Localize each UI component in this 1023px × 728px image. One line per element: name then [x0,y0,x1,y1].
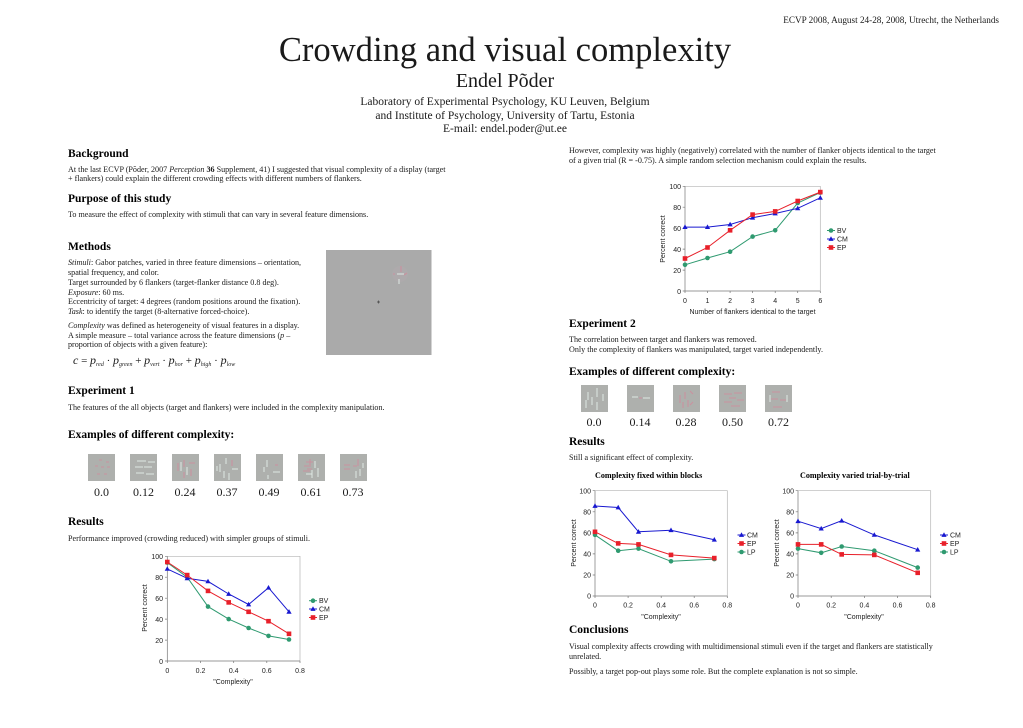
heading: purpose: Purpose of this study [68,193,171,205]
axis labels: 0.6 [262,668,272,675]
complexity formula: p [168,353,175,367]
panel: experiment 2 [569,318,823,462]
axis labels: Number of flankers identical to the target [689,309,816,316]
axis labels: 100 [151,554,163,561]
methods text: Complexity was defined as heterogeneity of visual features in a display. [68,321,299,330]
legend [940,532,961,556]
example 0.0 [88,454,115,481]
axis labels: 0.6 [689,602,699,610]
methods text [67,258,301,349]
legend [309,598,330,622]
complexity formula: hor [175,362,184,368]
methods text: Task: to identify the target (8-alternative forced-choice). [68,307,249,316]
complexity formula: p [112,353,119,367]
author and affiliations: E-mail: endel.poder@ut.ee [443,123,567,135]
axis labels: 0 [683,298,687,305]
results text: Still a significant effect of complexity. [569,453,693,462]
series EP [593,530,717,560]
example 0.37 [214,454,241,481]
axis labels: 0.2 [196,668,205,675]
conference note: ECVP 2008, August 24-28, 2008, Utrecht, the Netherlands [783,15,999,25]
methods text: Eccentricity of target: 4 degrees (random positions around the fixation). [68,297,300,306]
panel: conclusions [569,624,934,676]
complexity formula: high [201,362,211,368]
heading: methods: Methods [68,241,111,253]
example values: 0.61 [300,485,322,499]
conclusions text: Possibly, a target pop-out plays some role. But the complete explanation is not so simple. [569,667,858,676]
legend: CM [747,532,758,540]
axis labels: 40 [583,552,591,558]
legend: BV [319,598,329,605]
example 0.12 [130,454,157,481]
axis labels: Percent correct [571,519,578,567]
series EP [683,190,823,261]
experiment 2 text: The correlation between target and flankers was removed. [569,335,757,344]
axis labels: 0.4 [656,602,666,610]
background text: At the last ECVP (Põder, 2007 Perception 36 Supplement, 41) I suggested that visual complexity of a display (target [68,165,446,174]
methods text: Stimuli: Gabor patches, varied in three feature dimensions – orientation, [68,258,301,267]
axis labels: 40 [673,247,681,254]
complexity formula: · [160,355,169,367]
axis labels: 20 [673,268,681,275]
heading: background: Background [68,148,129,160]
author and affiliations [360,70,650,135]
example 0.14 [627,385,654,412]
axis labels [660,184,822,316]
axis labels: 0.2 [826,602,836,610]
legend [738,532,758,556]
axis labels: 100 [579,488,591,496]
example values: 0.49 [258,485,280,499]
legend: LP [747,550,756,556]
complexity formula: · [104,355,113,367]
stimulus examples row [88,454,367,499]
complexity formula: vert [150,362,160,368]
results text: Performance improved (crowding reduced) with simpler groups of stimuli. [68,534,310,543]
line chart: percent correct by identical flankers [660,184,848,316]
experiment 1 text: The features of the all objects (target and flankers) were included in the complexity manipulation. [68,403,385,412]
axis labels: 0.6 [893,602,902,610]
axis labels: Percent correct [774,519,781,567]
axis labels: 2 [728,298,732,305]
axis labels: 0.8 [926,602,936,610]
complexity formula: p [143,353,150,367]
axis labels: 0 [796,602,800,610]
example values: 0.14 [630,415,650,429]
axis labels: 0 [159,659,163,666]
series BV [683,190,823,267]
example values: 0.72 [768,415,789,429]
legend: EP [950,541,960,548]
line chart: complexity varied trial-by-trial [774,471,961,621]
axis labels: 80 [583,510,591,516]
methods text: Exposure: 60 ms. [67,288,124,297]
series CM [682,195,823,229]
axis labels: 3 [751,298,755,305]
axis labels: 0 [593,602,597,610]
example 0.49 [256,454,283,481]
axis labels [571,488,732,621]
complexity formula: c = p [73,353,96,367]
methods text: spatial frequency, and color. [68,268,159,277]
legend: EP [747,541,757,548]
legend [827,228,848,252]
heading: examples: Examples of different complexity: [68,429,234,441]
axis labels: 20 [786,572,794,580]
series LP [796,544,920,570]
example values: 0.37 [216,485,238,499]
axis labels: 100 [669,184,681,191]
example values: 0.50 [722,415,743,429]
axis labels [142,554,305,686]
series BV [165,560,291,642]
heading: examples: Examples of different complexity: [569,366,735,378]
axis labels [774,488,936,621]
axis labels: 5 [796,298,800,305]
conclusions text [569,642,934,676]
complexity formula: + [183,355,195,367]
methods text: proportion of objects with a given feature): [68,340,207,349]
experiment 2 text: Only the complexity of flankers was manipulated, target varied independently. [569,345,823,354]
axis labels: 0.4 [860,602,869,610]
example values: 0.24 [174,485,196,499]
axis labels: 60 [583,530,591,538]
series CM [795,518,920,552]
chart title: Complexity fixed within blocks [595,471,702,480]
panel: experiment 1 [68,385,385,543]
legend: CM [950,532,961,540]
heading: experiment 2: Experiment 2 [569,318,636,330]
conclusions text: unrelated. [569,652,601,661]
panel: correlation text: of a given trial (R = -0.75). A simple random selection mechanism could explain the results. [569,156,867,165]
author and affiliations: Endel Põder [456,70,554,92]
axis labels: 80 [155,575,163,582]
author and affiliations: and Institute of Psychology, University of Tartu, Estonia [375,110,635,122]
series CM [592,503,717,542]
axis labels: 1 [706,298,710,305]
experiment 2 text [569,335,823,354]
line chart: complexity fixed within blocks [571,471,758,621]
title: Crowding and visual complexity [279,31,732,69]
example 0.0 [581,385,608,412]
axis labels: 20 [155,638,163,645]
axis labels: 40 [155,617,163,624]
complexity formula: red [96,362,105,368]
axis labels: "Complexity" [641,614,681,621]
complexity formula: + [132,355,144,367]
panel: methods [67,241,432,368]
line chart: percent correct by complexity [142,554,330,686]
axis labels: 0.4 [229,668,239,675]
axis labels: 0 [165,668,169,675]
axis labels: 0 [790,594,794,600]
series EP [796,542,920,575]
complexity formula: green [119,362,132,368]
heading: experiment 1: Experiment 1 [68,385,135,397]
background text: + flankers) could explain the different crowding effects with different numbers of flankers. [68,174,362,183]
legend: BV [837,228,847,235]
axis labels: 60 [673,226,681,233]
series LP [593,533,717,564]
axis labels: "Complexity" [844,614,884,621]
series EP [165,560,291,636]
example values: 0.73 [342,485,364,499]
example 0.28 [673,385,700,412]
axis labels: 0.8 [295,668,305,675]
example 0.61 [298,454,325,481]
panel: background [68,148,446,183]
axis labels: 0.2 [623,602,633,610]
heading: results: Results [569,436,605,448]
stimulus display image [326,250,432,355]
example values: 0.0 [94,485,109,499]
example values: 0.12 [133,485,154,499]
axis labels: 6 [818,298,822,305]
methods text: Target surrounded by 6 flankers (target-flanker distance 0.8 deg). [68,278,279,287]
example values [586,415,789,429]
axis labels: 4 [773,298,777,305]
axis labels: 0 [587,594,591,600]
axis labels: 60 [155,596,163,603]
axis labels: 60 [786,530,794,538]
heading: conclusions: Conclusions [569,624,629,636]
axis labels: 80 [673,205,681,212]
axis labels: Percent correct [142,584,149,632]
complexity formula: low [227,362,235,368]
methods text: A simple measure – total variance across the feature dimensions (p – [68,331,291,340]
example 0.73 [340,454,367,481]
legend: LP [950,550,959,556]
stimulus examples row [581,385,792,429]
example values: 0.0 [586,415,602,429]
purpose text: To measure the effect of complexity with stimuli that can vary in several feature dimensions. [68,210,368,219]
legend: CM [837,236,848,244]
example values: 0.28 [676,415,696,429]
axis labels: 100 [782,488,794,496]
background text [68,165,446,183]
example 0.24 [172,454,199,481]
complexity formula: p [194,353,201,367]
example values [94,485,364,499]
panel: purpose [68,193,368,219]
author and affiliations: Laboratory of Experimental Psychology, KU Leuven, Belgium [360,96,650,108]
axis labels: 0 [677,289,681,296]
heading: results: Results [68,516,104,528]
series CM [165,566,292,614]
axis labels: 80 [786,510,794,516]
axis labels: 40 [786,552,794,558]
axis labels: Percent correct [660,215,667,263]
panel: correlation text [569,146,937,165]
axis labels: 0.8 [722,602,732,610]
complexity formula: p [220,353,227,367]
axis labels: "Complexity" [213,679,253,686]
axis labels: 20 [583,572,591,580]
example 0.72 [765,385,792,412]
legend: EP [319,615,329,622]
complexity formula: · [211,355,221,367]
legend: EP [837,245,847,252]
example 0.50 [719,385,746,412]
panel: correlation text: However, complexity was highly (negatively) correlated with the number of flanker objects identical to the target [569,146,937,155]
legend: CM [319,606,330,614]
chart title: Complexity varied trial-by-trial [800,471,910,480]
conclusions text: Visual complexity affects crowding with multidimensional stimuli even if the target and flankers are statistically [569,642,934,651]
